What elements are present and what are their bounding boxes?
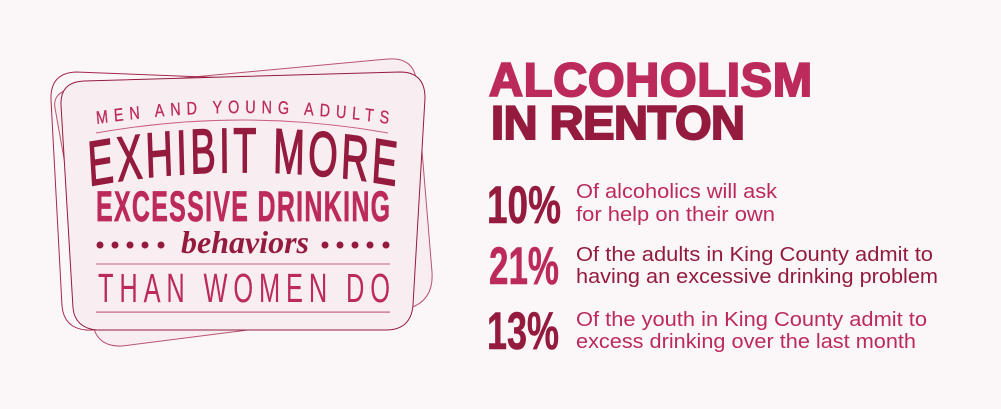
stat number: 10% [487, 176, 561, 235]
front card [61, 72, 425, 330]
stat number: 13% [487, 302, 559, 361]
quote: excessive drinking: EXCESSIVE DRINKING [96, 183, 390, 231]
stat description: having an excessive drinking problem [576, 266, 938, 288]
title line one: ALCOHOLISM [489, 53, 812, 106]
stat number: 21% [489, 237, 559, 296]
stat description: Of the adults in King County admit to [576, 244, 933, 266]
title line two: IN RENTON [491, 96, 745, 149]
arched rule [96, 120, 388, 133]
stat description: for help on their own [576, 204, 775, 226]
stat description: Of alcoholics will ask [576, 181, 778, 203]
rule above closing line [96, 264, 390, 265]
dots left [96, 242, 164, 248]
title [489, 53, 812, 149]
stat description: excess drinking over the last month [576, 331, 916, 353]
back card tilted left [55, 59, 432, 346]
stat: 10 percent [487, 176, 778, 235]
dots right [322, 242, 390, 248]
quote: behaviors: behaviors [181, 224, 309, 260]
stat: 13 percent [487, 302, 927, 361]
quote: men and young adults: MEN AND YOUNG ADULTS [96, 100, 389, 124]
quote: than women do: THAN WOMEN DO [98, 266, 390, 312]
back card tilted right [51, 72, 230, 330]
stat: 21 percent [489, 237, 938, 296]
quote: exhibit more: EXHIBIT MORE [89, 128, 397, 186]
stat description: Of the youth in King County admit to [576, 309, 927, 331]
panel: stacked card quote [50, 58, 433, 347]
rule below closing line [96, 312, 390, 313]
